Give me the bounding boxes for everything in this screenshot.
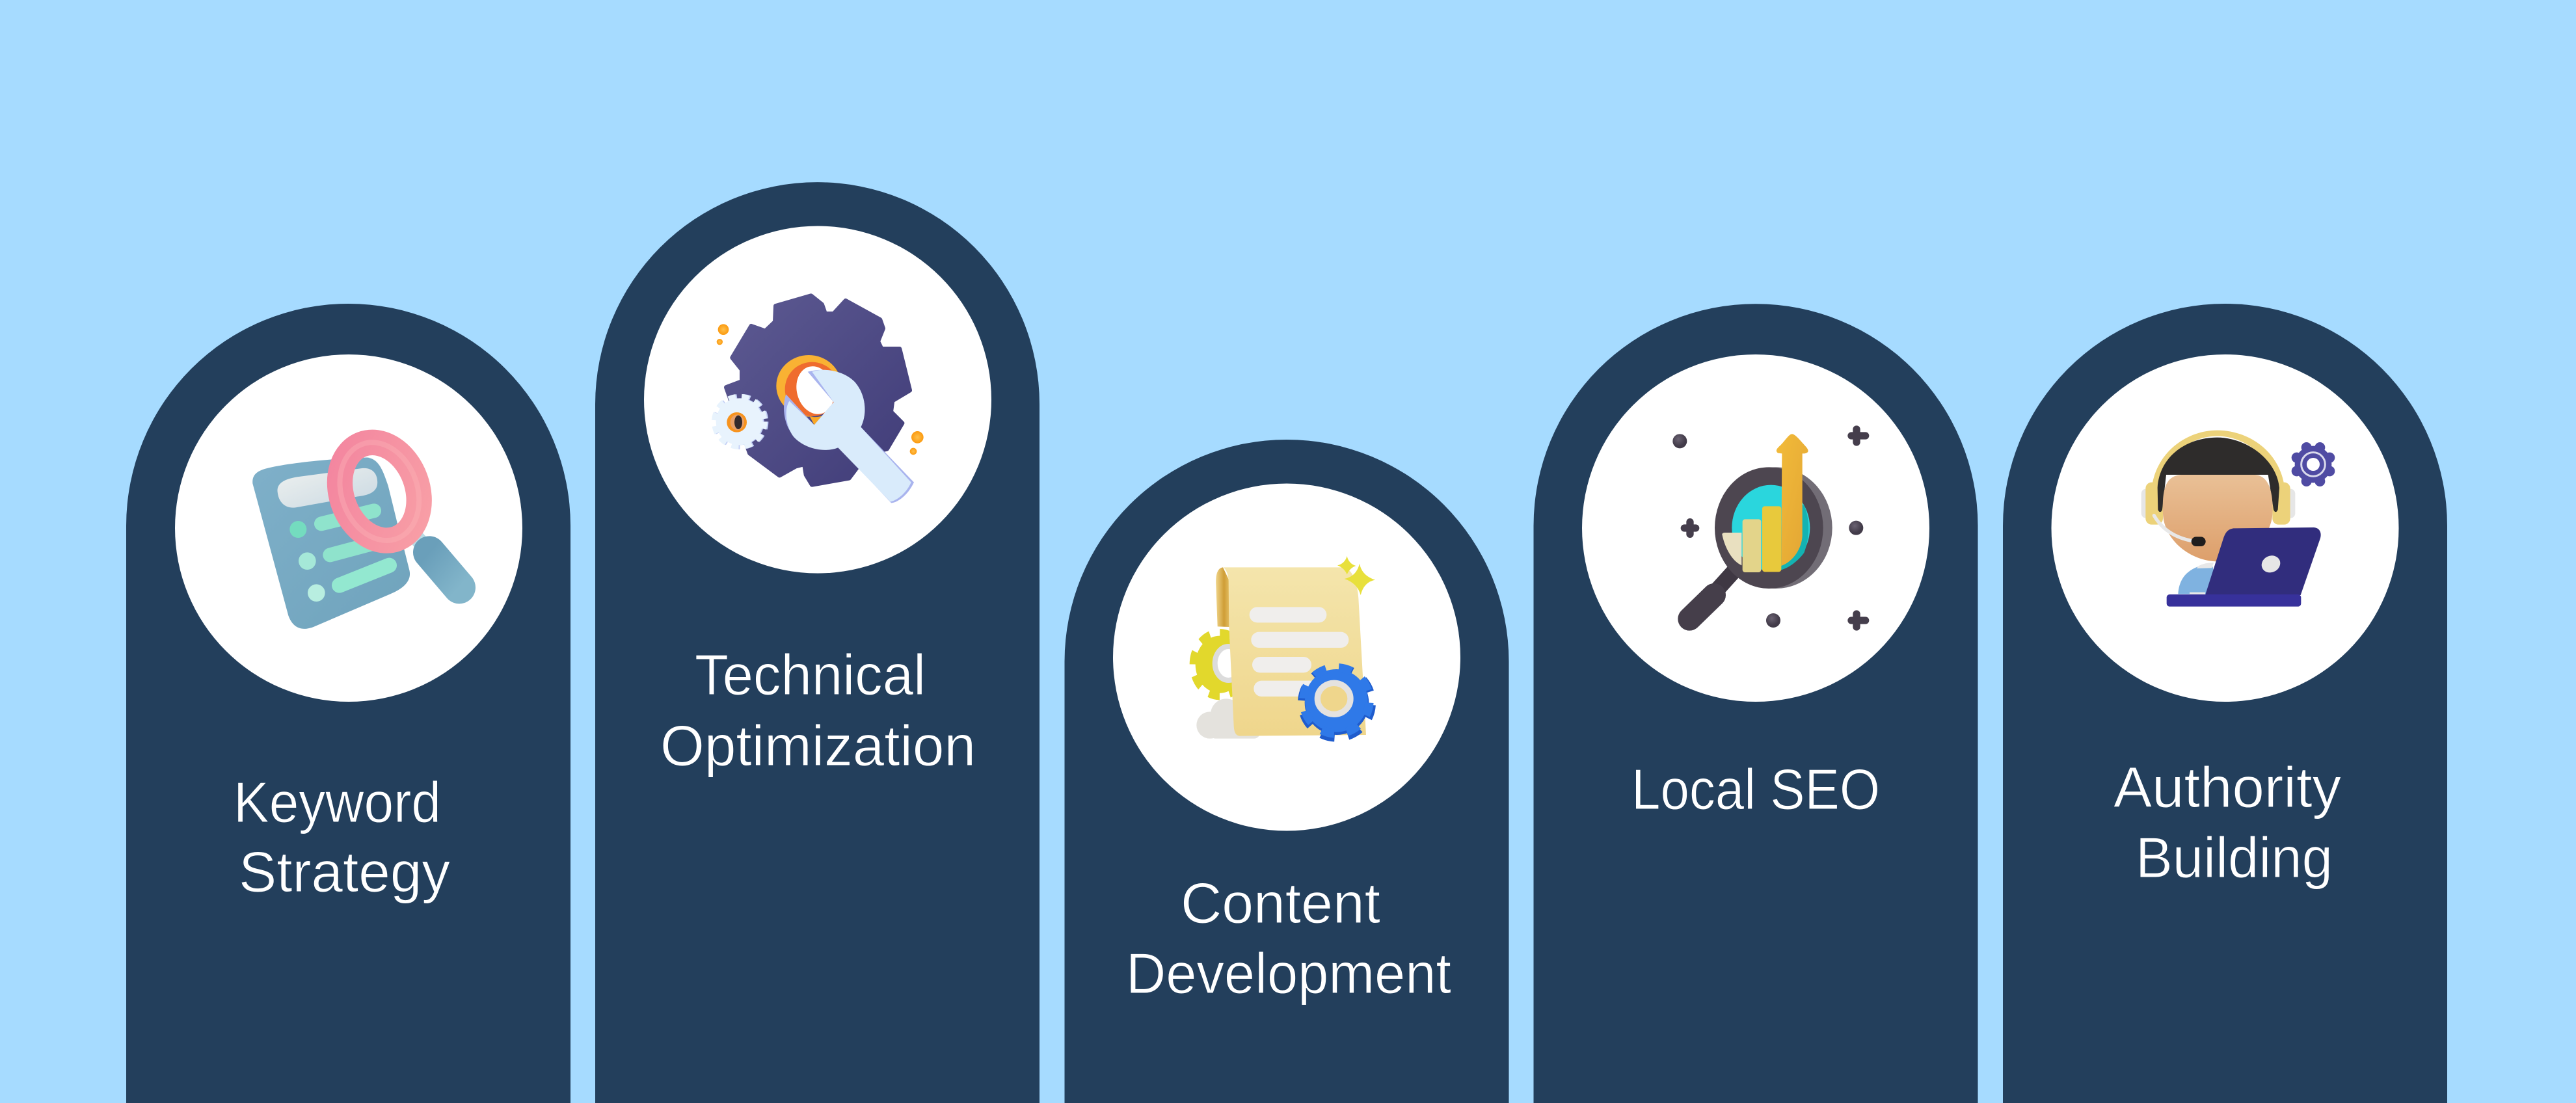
icon: support agent with laptop	[2141, 431, 2335, 607]
white circle	[175, 354, 522, 702]
arch shape	[1064, 440, 1509, 1103]
text: Local SEO: Local SEO	[1631, 757, 1880, 821]
icon: document with magnifier	[252, 431, 459, 629]
panel: keyword strategy	[126, 304, 570, 1103]
panel: content development	[1064, 440, 1509, 1103]
text: Content Development	[1126, 871, 1451, 1005]
text: Content Development: Content	[1181, 871, 1380, 935]
white circle	[2052, 354, 2399, 702]
arch shape	[126, 304, 570, 1103]
icon: document with gears	[1193, 556, 1375, 739]
text: Authority Building: Building	[2136, 825, 2333, 890]
text: Keyword Strategy: Strategy	[239, 840, 450, 904]
panel: authority building	[2003, 304, 2447, 1103]
white circle	[1113, 484, 1460, 831]
white circle	[644, 226, 991, 574]
text: Technical Optimization	[660, 643, 976, 778]
arch shape	[2003, 304, 2447, 1103]
panel: local seo	[1534, 304, 1978, 1103]
icon: magnifier with chart	[1672, 429, 1866, 628]
text: Content Development: Development	[1126, 941, 1451, 1005]
arch shape	[595, 182, 1040, 1103]
text: Technical Optimization: Optimization	[660, 713, 976, 778]
white circle	[1582, 354, 1929, 702]
text: Authority Building: Authority	[2113, 755, 2341, 819]
text: Keyword Strategy: Keyword	[234, 770, 441, 834]
text: Technical Optimization: Technical	[695, 643, 926, 707]
text: Authority Building	[2113, 755, 2341, 890]
arch shape	[1534, 304, 1978, 1103]
panel: technical optimization	[595, 182, 1040, 1103]
text: Keyword Strategy	[234, 770, 450, 904]
icon: gear and wrench	[714, 296, 924, 503]
